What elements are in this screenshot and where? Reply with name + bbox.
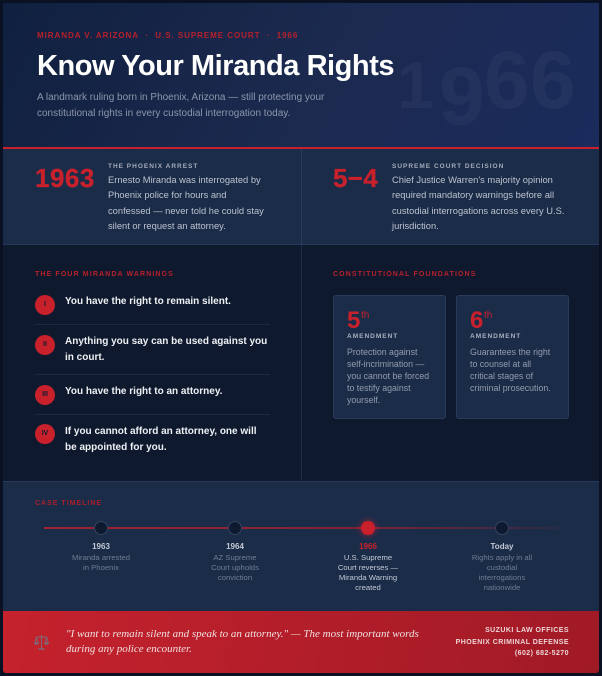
warning III: [35, 385, 222, 405]
amendment number: th: [361, 310, 369, 321]
heading: constitutional foundations: CONSTITUTIONAL FOUNDATIONS: [333, 271, 477, 278]
stat number 1963: 1963: [35, 163, 95, 193]
amendment text: Guarantees the right: [470, 347, 550, 357]
subtitle: constitutional rights in every custodial interrogation today.: [37, 108, 290, 119]
subtitle: [37, 92, 324, 119]
timeline entry today: custodial: [487, 563, 517, 572]
amendment text: to counsel at all: [470, 359, 531, 369]
footer firm details: [456, 627, 569, 657]
amendment number: [470, 307, 492, 334]
stat text: [108, 175, 264, 231]
timeline entry 1963: [72, 542, 130, 572]
amendment number: [347, 307, 369, 334]
heading: case timeline: CASE TIMELINE: [35, 500, 102, 507]
amendment text: self-incrimination —: [347, 359, 424, 369]
timeline entry 1963: in Phoenix: [83, 563, 119, 572]
amendment text: [347, 347, 429, 405]
amendment text: yourself.: [347, 395, 380, 405]
watermark year: 6: [530, 35, 576, 126]
footer quote: during any police encounter.: [66, 643, 192, 655]
amendment label: AMENDMENT: [470, 333, 521, 340]
footer panel: [3, 611, 599, 673]
middle panel background: [3, 245, 599, 482]
warning I: You have the right to remain silent.: [65, 296, 231, 307]
timeline entry 1963: 1963: [92, 542, 110, 551]
stat label: SUPREME COURT DECISION: [392, 163, 504, 170]
timeline entry today: Today: [491, 542, 513, 551]
timeline entry 1966: [338, 542, 398, 592]
stat text: Chief Justice Warren's majority opinion: [392, 175, 553, 185]
stat: 1963 arrest: [35, 163, 264, 231]
stat text: custodial interrogations across every U.S.: [392, 206, 564, 216]
stat text: [392, 175, 564, 231]
timeline node 1963: [94, 521, 108, 535]
warning II: in court.: [65, 352, 104, 362]
watermark year: 6: [484, 35, 530, 126]
warning IV: [35, 424, 256, 452]
timeline node 1964: [228, 521, 242, 535]
warning IV: be appointed for you.: [65, 442, 167, 452]
stat text: required mandatory warnings before all: [392, 190, 554, 200]
stat text: Phoenix police for hours and: [108, 190, 226, 200]
timeline entry 1966: 1966: [359, 542, 377, 551]
watermark year: 9: [439, 51, 485, 142]
stat text: jurisdiction.: [392, 221, 439, 231]
warning I: [35, 295, 231, 315]
warning III: You have the right to an attorney.: [65, 386, 222, 397]
timeline node today: [495, 521, 509, 535]
amendment text: to testify against: [347, 383, 411, 393]
timeline entry today: [472, 542, 532, 592]
stat text: Ernesto Miranda was interrogated by: [108, 175, 261, 185]
warning IV: IV: [42, 430, 48, 437]
footer firm details: PHOENIX CRIMINAL DEFENSE: [456, 639, 569, 646]
stat text: silent or request an attorney.: [108, 221, 226, 231]
warning I: I: [44, 301, 46, 308]
timeline entry 1966: created: [355, 583, 381, 592]
warning II: II: [43, 341, 47, 348]
footer firm details: (602) 682-5270: [515, 650, 569, 657]
card: 5th amendment: [333, 295, 446, 419]
amendment number: 6: [470, 307, 483, 334]
warning IV: If you cannot afford an attorney, one will: [65, 426, 256, 437]
timeline node 1966: [361, 521, 375, 535]
footer quote: [66, 628, 419, 655]
timeline entry today: nationwide: [484, 583, 520, 592]
warnings list: [35, 295, 270, 452]
amendment text: [470, 347, 551, 393]
amendment number: 5: [347, 307, 360, 334]
timeline entry 1963: Miranda arrested: [72, 553, 130, 562]
timeline entry 1966: Miranda Warning: [339, 573, 397, 582]
timeline entry 1964: conviction: [218, 573, 252, 582]
subtitle: A landmark ruling born in Phoenix, Arizona — still protecting your: [37, 92, 324, 103]
warning II: [35, 335, 267, 362]
icon: scales of justice: [34, 635, 49, 650]
timeline entry 1964: Court upholds: [211, 563, 259, 572]
amendment text: critical stages of: [470, 371, 533, 381]
amendment text: Protection against: [347, 347, 417, 357]
amendment label: AMENDMENT: [347, 333, 398, 340]
heading: four warnings: THE FOUR MIRANDA WARNINGS: [35, 271, 174, 278]
card: 6th amendment: [456, 295, 569, 419]
timeline entry 1964: [211, 542, 259, 582]
timeline entry 1964: AZ Supreme: [213, 553, 257, 562]
eyebrow: MIRANDA V. ARIZONA · U.S. SUPREME COURT · 1966: [37, 31, 298, 40]
watermark year: 1: [397, 48, 434, 122]
timeline panel: [3, 482, 599, 611]
amendment number: th: [484, 310, 492, 321]
title: Know Your Miranda Rights: [37, 50, 394, 82]
column divider: [301, 245, 302, 481]
column divider: [301, 149, 302, 244]
stats row panel: [3, 149, 599, 245]
warning II: Anything you say can be used against you: [65, 336, 267, 347]
stat: 5-4 decision: [333, 163, 564, 231]
timeline entry today: interrogations: [479, 573, 525, 582]
stat number 5-4: 5−4: [333, 163, 378, 193]
header panel: [3, 3, 599, 149]
timeline entry 1966: U.S. Supreme: [344, 553, 392, 562]
timeline entry today: Rights apply in all: [472, 553, 532, 562]
warning III: III: [42, 391, 48, 398]
watermark year: [397, 35, 576, 142]
timeline line: [44, 527, 559, 529]
timeline entry 1964: 1964: [226, 542, 244, 551]
stat label: THE PHOENIX ARREST: [108, 163, 198, 170]
amendment text: criminal prosecution.: [470, 383, 551, 393]
amendment text: you cannot be forced: [347, 371, 429, 381]
stat text: confessed — never told he could stay: [108, 206, 264, 216]
timeline entry 1966: Court reverses —: [338, 563, 398, 572]
footer firm details: SUZUKI LAW OFFICES: [485, 627, 569, 634]
footer quote: "I want to remain silent and speak to an attorney." — The most important words: [66, 628, 419, 640]
